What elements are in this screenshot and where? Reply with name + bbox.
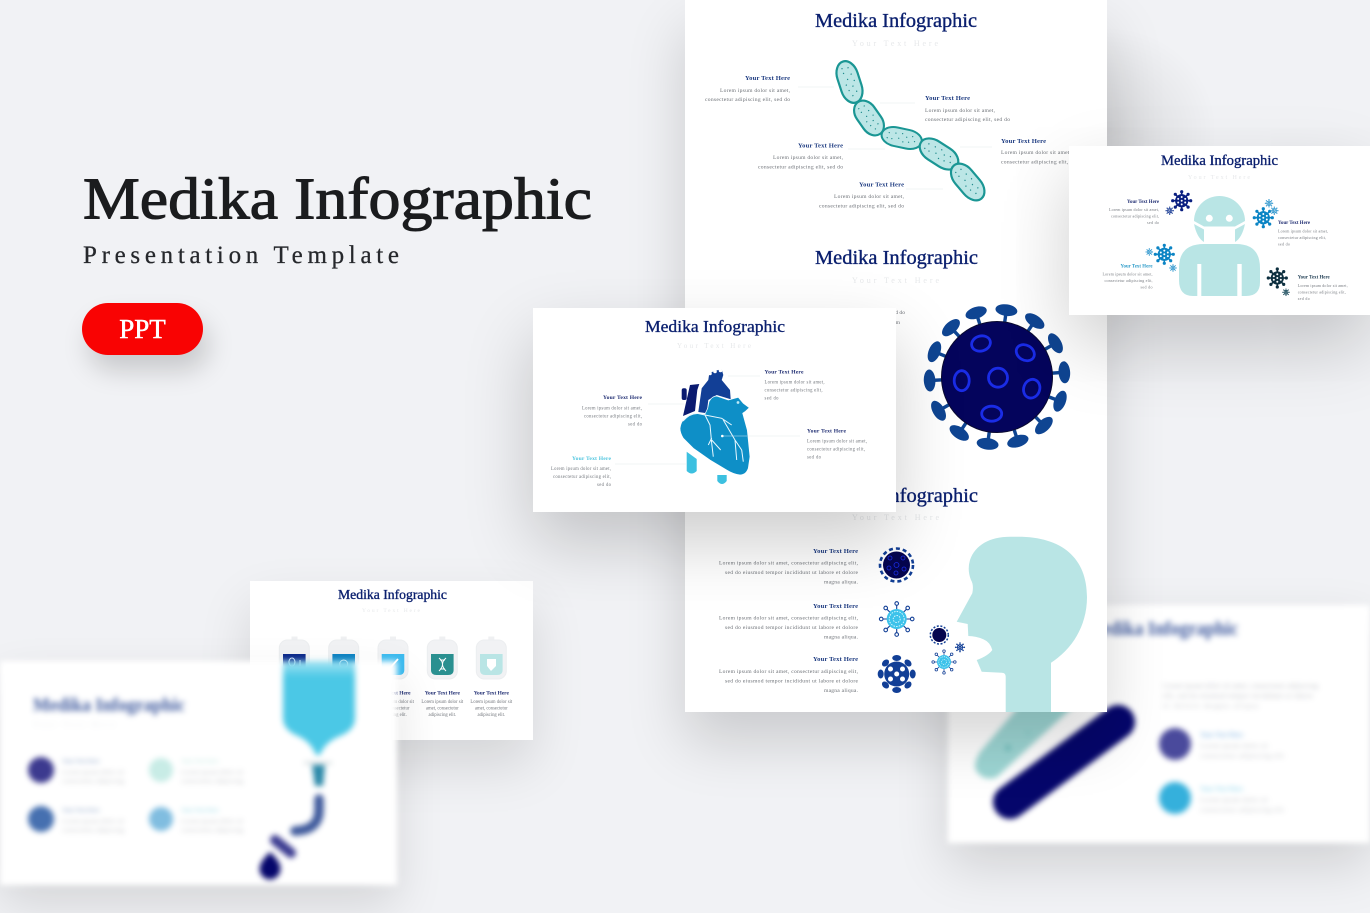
illustration: anatomical heart: [680, 369, 750, 484]
panel: IV bag slide: [250, 581, 533, 740]
icon: blue circle: [28, 806, 54, 832]
icon: small blue virus lower: [1270, 206, 1279, 215]
icon: small blue virus upper: [1265, 199, 1273, 208]
text block: cough item one: sed do eiusmod tempor incididunt ut labore et dolore: [725, 570, 859, 576]
title: Medika Infographic: Medika Infographic: [83, 166, 592, 232]
text block: bacteria label one: consectetur adipiscing elit, sed do: [705, 97, 790, 103]
heading: bacteria slide title: Medika Infographic: [815, 10, 977, 32]
icon: small dark droplet virus: [930, 626, 948, 644]
heading: blurred title: Medika Infographic: [33, 695, 185, 716]
text block: cough item three: Your Text Here: [813, 656, 858, 663]
heading: mask slide title: Medika Infographic: [1161, 153, 1278, 169]
icon: navy circle: [1159, 728, 1191, 760]
text block: IV label three: [372, 690, 415, 718]
text block: IV label two: Your Text Here: [326, 690, 362, 696]
chart: bacteria chain: [833, 58, 990, 205]
text block: blurred item four: Lorem ipsum dolor sit: [181, 818, 243, 825]
subtitle: Presentation Template: Presentation Template: [83, 242, 399, 269]
text block: mask label four: Your Text Here: [1298, 276, 1330, 280]
text block: blurred item two: consectetur adipiscing: [181, 778, 244, 785]
text block: blurred item one: Your Text Here: [62, 758, 100, 765]
text block: bacteria label five: [819, 182, 905, 210]
text block: IV label one: amet, consectetur: [278, 706, 311, 712]
text block: blurred item four: Your Text Here: [181, 807, 219, 814]
text block: IV label one: [273, 690, 316, 718]
icon: small dark teal virus: [1282, 288, 1290, 296]
icon: blue virus left: [1154, 244, 1175, 265]
text block: IV label three: Your Text Here: [375, 690, 411, 696]
text block: heart label four: Lorem ipsum dolor sit amet,: [807, 440, 867, 444]
text block: blurred paragraph: [1163, 682, 1318, 710]
icon: navy virus: [1171, 190, 1192, 211]
text block: cough item one: [719, 548, 859, 586]
subtitle: bacteria slide: Your Text Here: [852, 39, 938, 48]
text block: heart label one: Lorem ipsum dolor sit amet,: [582, 406, 642, 412]
badge: PPT button: PPT: [119, 314, 166, 344]
text block: cough item three: Lorem ipsum dolor sit amet, consectetur adipiscing elit,: [719, 669, 859, 675]
icon: IV bag five: [476, 636, 506, 679]
text block: heart label one: sed do: [628, 422, 643, 428]
text block: bacteria label three: [758, 142, 844, 170]
text block: bacteria label two: consectetur adipiscing elit, sed do: [925, 117, 1010, 123]
text block: blurred item three: consectetur adipiscing: [62, 827, 125, 834]
icon: small navy droplet virus: [955, 642, 965, 652]
text block: heart label three: sed do: [764, 396, 779, 402]
subtitle: IV slide: Your Text Here: [362, 608, 421, 614]
heading: blurred title: Medika Infographic: [1085, 618, 1238, 640]
text block: virus label remnants: sed do: [891, 310, 905, 316]
text block: blurred item two: Your Text Here: [181, 758, 219, 765]
text block: cough item one: magna aliqua.: [824, 580, 859, 586]
text block: cough item two: magna aliqua.: [824, 634, 859, 640]
text block: bacteria label one: Your Text Here: [745, 75, 790, 82]
panel: medical slides column: [685, 0, 1107, 712]
text block: mask label three: [1102, 264, 1152, 290]
text block: mask label four: consectetur adipiscing elit,: [1298, 290, 1346, 296]
icon: dark spiked virus: [880, 548, 913, 582]
text block: heart label three: consectetur adipiscing elit,: [764, 388, 822, 394]
icon: IV bag four with DNA: [427, 636, 457, 679]
text block: cough item one: Lorem ipsum dolor sit amet, consectetur adipiscing elit,: [719, 560, 859, 566]
text block: blurred item two: Lorem ipsum dolor sit: [181, 769, 243, 776]
heading: cough slide title: Medika Infographic: [815, 485, 978, 507]
text block: bacteria label two: [925, 95, 1010, 123]
text block: item two: [1200, 785, 1284, 814]
illustration: head profile: [957, 537, 1087, 712]
illustration: IV bag and tube: [260, 658, 355, 880]
text block: mask label four: [1298, 276, 1348, 301]
text block: cough item two: Lorem ipsum dolor sit amet, consectetur adipiscing elit,: [719, 616, 859, 622]
text block: heart label two: sed do: [597, 483, 612, 488]
text block: IV label five: adipiscing elit.: [477, 713, 505, 718]
text block: blurred item three: Your Text Here: [62, 807, 100, 814]
text block: heart label four: sed do: [807, 456, 822, 460]
text block: IV label five: amet, consectetur: [475, 706, 508, 712]
text block: mask label four: Lorem ipsum dolor sit amet,: [1298, 283, 1348, 289]
text block: mask label two: sed do: [1278, 242, 1290, 246]
text block: blurred paragraph: Lorem ipsum dolor sit amet, consectetur adipiscing: [1163, 682, 1318, 690]
text block: IV label three: adipiscing elit.: [379, 713, 407, 718]
icon: small cyan droplet virus: [932, 650, 956, 674]
icon: navy circle: [28, 757, 54, 783]
icon: navy dotted virus: [878, 655, 916, 693]
text block: heart label one: Your Text Here: [603, 395, 643, 401]
text block: virus label remnants: m: [896, 320, 901, 326]
text block: blurred item one: consectetur adipiscing: [62, 778, 125, 785]
panel: heart slide: [533, 308, 896, 512]
text block: heart label one: consectetur adipiscing elit,: [584, 414, 642, 420]
text block: mask label two: consectetur adipiscing elit,: [1278, 235, 1326, 241]
text block: heart label two: Your Text Here: [572, 456, 612, 462]
text block: IV label five: Lorem ipsum dolor sit: [470, 700, 513, 705]
text block: item one: Lorem ipsum dolor sit: [1200, 742, 1268, 750]
text block: mask label one: Lorem ipsum dolor sit amet,: [1109, 207, 1159, 213]
text block: bacteria label five: consectetur adipiscing elit, sed do: [819, 204, 904, 210]
text block: IV label two: amet, consectetur: [327, 706, 361, 712]
text block: blurred item four: [181, 807, 244, 834]
text block: IV label five: Your Text Here: [474, 690, 509, 696]
text block: blurred item three: Lorem ipsum dolor sit: [62, 818, 124, 825]
text block: cough item two: Your Text Here: [813, 603, 858, 610]
text block: item two: Your Text Here: [1200, 785, 1243, 793]
subtitle: heart slide: Your Text Here: [677, 342, 751, 350]
heading: virus slide title: Medika Infographic: [815, 247, 978, 269]
text block: heart label four: Your Text Here: [807, 428, 847, 434]
text block: IV label five: [470, 690, 513, 718]
text block: heart label four: [807, 428, 867, 460]
text block: cough item three: [719, 656, 859, 694]
text block: IV label three: Lorem ipsum dolor sit: [372, 700, 415, 705]
text block: IV label one: Your Text Here: [277, 690, 312, 696]
text block: bacteria label three: consectetur adipiscing elit, sed do: [758, 164, 843, 170]
text block: bacteria label two: Your Text Here: [925, 95, 970, 102]
text block: bacteria label four: [1001, 138, 1086, 166]
icon: blue virus right: [1253, 207, 1274, 228]
text block: item one: consectetur adipiscing elit: [1200, 752, 1284, 760]
icon: small navy virus: [1165, 206, 1174, 215]
text block: heart label four: consectetur adipiscing elit,: [807, 448, 865, 452]
panel: blurred bacteria slide: [948, 605, 1370, 843]
text block: bacteria label five: Your Text Here: [859, 182, 904, 188]
text block: IV label four: Your Text Here: [425, 690, 460, 696]
text block: mask label one: [1109, 200, 1159, 225]
text block: bacteria label three: Your Text Here: [798, 142, 843, 150]
text block: heart label one: [582, 395, 643, 428]
text block: mask label two: Lorem ipsum dolor sit amet,: [1278, 228, 1328, 234]
text block: bacteria label two: Lorem ipsum dolor sit amet,: [925, 108, 996, 114]
text block: mask label two: [1278, 221, 1328, 246]
icon: large coronavirus: [923, 303, 1071, 451]
icon: IV bag two: [329, 636, 359, 679]
icon: mint circle: [149, 758, 173, 782]
text block: item one: [1200, 731, 1284, 760]
text block: blurred item four: consectetur adipiscing: [181, 827, 244, 834]
heading: heart slide title: Medika Infographic: [645, 317, 785, 336]
text block: IV label one: Lorem ipsum dolor sit: [273, 700, 316, 705]
text block: heart label two: Lorem ipsum dolor sit amet,: [551, 467, 611, 472]
text block: virus label remnants: [891, 310, 905, 326]
text block: cough item two: sed do eiusmod tempor incididunt ut labore et dolore: [725, 625, 859, 631]
subtitle: virus slide: Your Text Here: [852, 276, 939, 285]
text block: bacteria label four: Your Text Here: [1001, 138, 1046, 145]
illustration: person with mask: [1179, 196, 1260, 297]
text block: heart label two: [551, 456, 612, 488]
bacteria: teal capsule: [975, 705, 1075, 779]
text block: blurred paragraph: elit, sed do eiusmod tempor incididunt ut labore: [1163, 692, 1313, 700]
icon: cyan circle: [1159, 782, 1191, 814]
panel: blurred IV infographic slide: [0, 661, 397, 885]
text block: mask label one: Your Text Here: [1127, 200, 1159, 205]
text block: bacteria label four: Lorem ipsum dolor sit amet,: [1001, 150, 1072, 156]
text block: IV label three: amet, consectetur: [377, 706, 410, 712]
text block: IV label four: [421, 690, 464, 718]
text block: item two: consectetur adipiscing elit: [1200, 806, 1284, 814]
text block: bacteria label five: Lorem ipsum dolor sit amet,: [834, 194, 905, 200]
text block: mask label three: Lorem ipsum dolor sit amet,: [1102, 272, 1152, 278]
text block: heart label three: Your Text Here: [764, 370, 804, 376]
text block: blurred item one: [62, 758, 125, 785]
text block: blurred paragraph: et dolore magna aliqua: [1163, 702, 1259, 710]
icon: IV bag three: [378, 636, 408, 679]
subtitle: blurred: Your Text Here: [33, 720, 115, 729]
text block: bacteria label four: consectetur adipiscing elit, sed do: [1001, 160, 1086, 166]
text block: cough item three: sed do eiusmod tempor incididunt ut labore et dolore: [725, 678, 859, 684]
text block: blurred item one: Lorem ipsum dolor sit: [62, 769, 124, 776]
text block: cough item two: [719, 603, 859, 640]
icon: IV bag one: [279, 636, 309, 679]
text block: IV label one: adipiscing elit.: [280, 713, 308, 718]
heading: IV slide title: Medika Infographic: [338, 587, 447, 602]
icon: dark teal virus: [1267, 267, 1288, 289]
text block: cough item three: magna aliqua.: [824, 688, 859, 694]
text block: IV label four: amet, consectetur: [426, 706, 459, 712]
text block: mask label three: consectetur adipiscing elit,: [1104, 278, 1152, 284]
subtitle: cough slide: Your Text Here: [852, 513, 939, 522]
text block: bacteria label one: Lorem ipsum dolor sit amet,: [720, 88, 791, 94]
text block: item two: Lorem ipsum dolor sit: [1200, 796, 1268, 804]
text block: heart label three: [764, 370, 824, 402]
text block: IV label two: Lorem ipsum dolor sit: [323, 700, 365, 705]
text block: mask label three: Your Text Here: [1120, 264, 1152, 270]
panel: mask slide: [1069, 146, 1370, 315]
bacteria: navy capsule: [1010, 722, 1118, 802]
text block: bacteria label three: Lorem ipsum dolor sit amet,: [773, 155, 844, 161]
icon: sky circle: [149, 807, 173, 831]
icon: cyan cell virus: [879, 602, 914, 636]
badge: PPT button: [82, 303, 203, 355]
text block: mask label one: consectetur adipiscing elit,: [1111, 214, 1159, 220]
text block: mask label three: sed do: [1140, 284, 1152, 290]
text block: IV label four: Lorem ipsum dolor sit: [421, 700, 464, 705]
text block: blurred item two: [181, 758, 244, 785]
text block: item one: Your Text Here: [1200, 731, 1243, 739]
text block: mask label two: Your Text Here: [1278, 221, 1310, 226]
text block: bacteria label one: [705, 75, 791, 103]
text block: IV label two: adipiscing elit.: [330, 713, 358, 718]
text block: mask label one: sed do: [1147, 220, 1159, 225]
subtitle: mask slide: Your Text Here: [1188, 175, 1250, 181]
icon: small blue virus bottom: [1169, 264, 1177, 272]
icon: small blue virus left: [1145, 248, 1153, 256]
text block: heart label two: consectetur adipiscing elit,: [553, 475, 611, 480]
text block: IV label two: [323, 690, 365, 718]
text block: mask label four: sed do: [1298, 296, 1310, 301]
text block: heart label three: Lorem ipsum dolor sit amet,: [764, 380, 824, 386]
text block: cough item one: Your Text Here: [813, 548, 858, 555]
text block: IV label four: adipiscing elit.: [428, 713, 456, 718]
text block: blurred item three: [62, 807, 125, 834]
